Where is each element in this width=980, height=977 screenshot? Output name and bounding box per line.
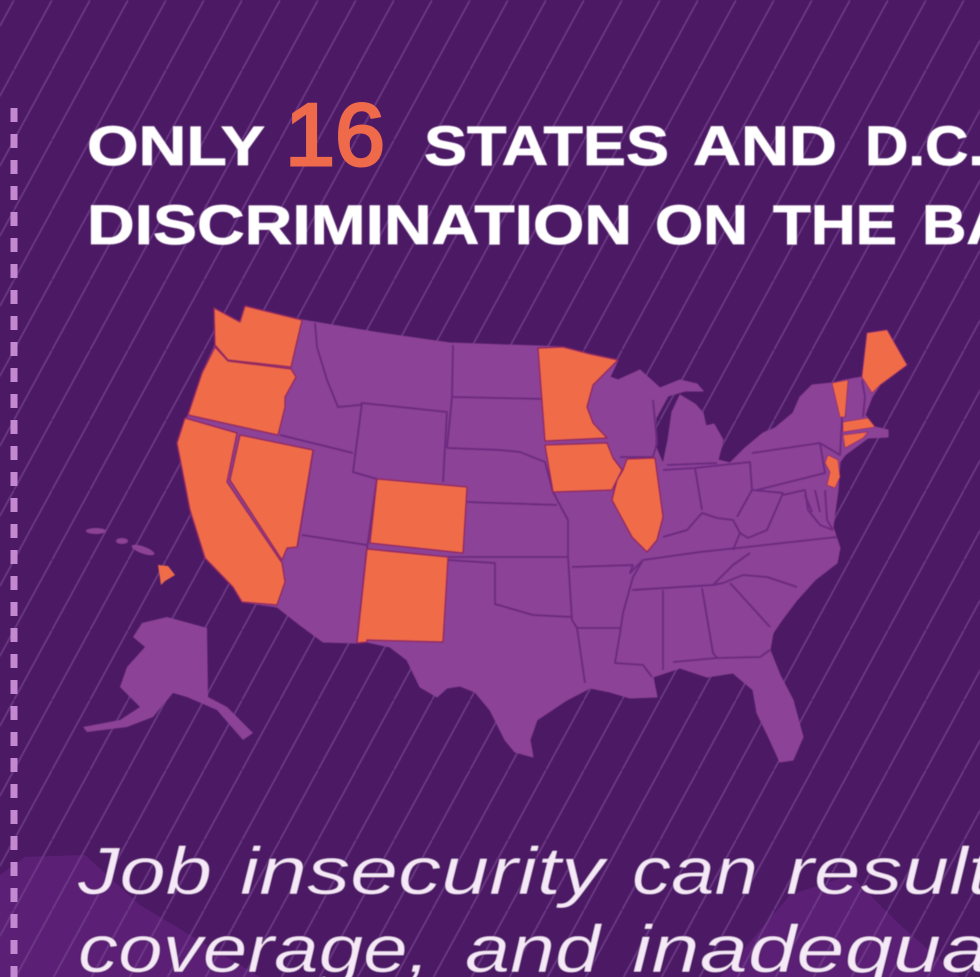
Massachusetts xyxy=(843,418,875,432)
Maine xyxy=(862,330,907,393)
Washington xyxy=(214,306,302,367)
Nevada xyxy=(230,435,313,560)
map of the United States xyxy=(83,306,907,762)
heading: ON xyxy=(655,193,748,256)
heading: DISCRIMINATION xyxy=(87,193,632,256)
body text: result xyxy=(786,834,980,909)
contiguous states base xyxy=(177,306,907,762)
Connecticut xyxy=(843,432,868,448)
Illinois xyxy=(612,458,663,552)
body text: Job xyxy=(77,834,212,909)
heading: THE xyxy=(773,193,897,256)
body text: insecurity xyxy=(240,834,609,909)
heading: D.C. xyxy=(865,114,980,177)
Vermont xyxy=(832,380,848,417)
New Mexico xyxy=(357,549,448,643)
heading xyxy=(87,114,980,256)
Alaska xyxy=(83,617,253,740)
highlighted states xyxy=(177,306,907,643)
Hawaii xyxy=(86,528,175,585)
heading: AND xyxy=(693,114,837,177)
New Jersey xyxy=(825,455,840,488)
heading: STATES xyxy=(424,114,669,177)
body text: can xyxy=(632,834,758,909)
state border lines xyxy=(280,323,865,683)
Minnesota xyxy=(538,347,618,441)
heading: ONLY xyxy=(87,114,265,177)
Oregon xyxy=(188,347,296,435)
Colorado xyxy=(370,479,467,553)
dashed vertical divider xyxy=(10,108,18,977)
California xyxy=(177,418,285,605)
body text xyxy=(77,834,980,977)
big number 16: 16 xyxy=(285,85,385,184)
Iowa xyxy=(545,443,622,492)
